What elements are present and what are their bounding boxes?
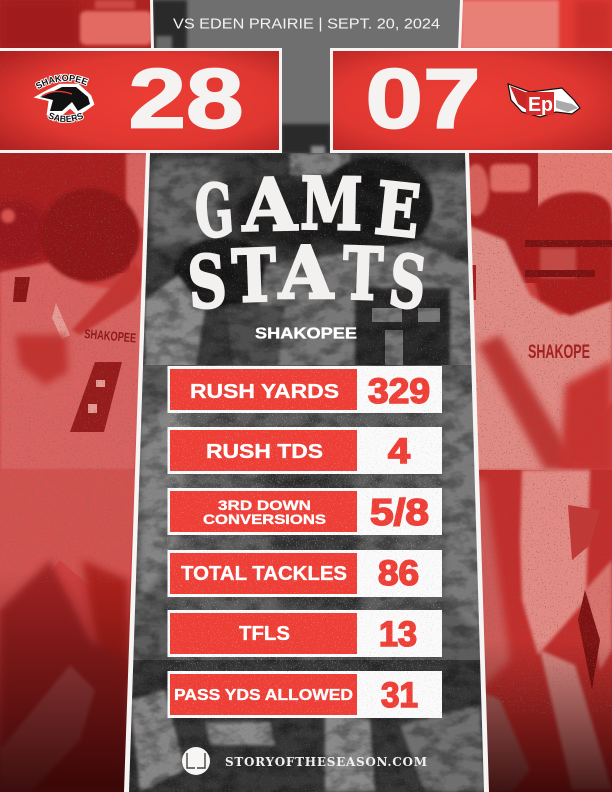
title: GAME STATS: A xyxy=(278,230,334,315)
stat row: rush TDs: RUSH TDS xyxy=(206,441,323,463)
stat row: rush yards xyxy=(168,366,442,413)
match line: VS EDEN PRAIRIE | SEPT. 20, 2024 xyxy=(173,16,440,32)
logo: Shakopee Sabers xyxy=(34,74,94,123)
title: GAME STATS: M xyxy=(300,160,363,247)
icon: Story of the Season book xyxy=(182,747,210,775)
stat row: 3rd down conversions: 5/8 xyxy=(370,492,429,533)
title: GAME STATS: S xyxy=(385,237,430,326)
website: STORYOFTHESEASON.COM xyxy=(225,755,427,769)
stat row: pass yards allowed: 31 xyxy=(381,676,418,715)
title: GAME STATS: A xyxy=(241,162,298,247)
photo: left player xyxy=(0,153,150,792)
stat row: total tackles xyxy=(168,550,442,597)
title: GAME STATS xyxy=(185,160,430,326)
panel: top left photo strip xyxy=(0,0,152,50)
panel: Shakopee score xyxy=(0,48,282,153)
stat row: TFLs xyxy=(168,610,442,657)
logo: Eden Prairie eagle xyxy=(508,84,580,117)
stat row: rush TDs: 4 xyxy=(388,432,411,471)
score: 28: 28 xyxy=(128,52,244,146)
stat row: pass yards allowed xyxy=(168,671,442,718)
team name: SHAKOPEE xyxy=(255,326,357,342)
title: GAME STATS: S xyxy=(185,238,229,325)
stat row: pass yards allowed: PASS YDS ALLOWED xyxy=(174,687,353,704)
title: GAME STATS: E xyxy=(371,165,424,254)
stat row: rush yards: RUSH YARDS xyxy=(190,381,339,403)
stat row: rush yards: 329 xyxy=(368,372,430,411)
stat row: rush TDs xyxy=(168,427,442,474)
white edge lines between photo panels xyxy=(124,0,489,792)
panel: Eden Prairie score xyxy=(330,48,612,153)
speckle over stat rows xyxy=(167,366,442,718)
photo: left player: SHAKOPEE xyxy=(84,326,137,346)
panel: top centre photo, black and white xyxy=(152,0,461,156)
title: GAME STATS: G xyxy=(192,167,236,254)
stat row: TFLs: TFLS xyxy=(239,623,290,645)
score: 07: 07 xyxy=(366,52,480,146)
stat row: 3rd down conversions: CONVERSIONS xyxy=(203,511,326,527)
stat row: 3rd down conversions xyxy=(168,488,442,535)
stat row: total tackles: TOTAL TACKLES xyxy=(181,563,347,585)
logo: Shakopee Sabers: SABERS xyxy=(48,112,84,123)
photo: right player xyxy=(463,153,612,792)
title: GAME STATS: T xyxy=(231,232,278,319)
panel: top right photo strip xyxy=(461,0,612,50)
stat row: 3rd down conversions: 3RD DOWN xyxy=(218,497,311,513)
logo: Eden Prairie eagle: Ep xyxy=(528,94,553,116)
title: GAME STATS: T xyxy=(341,230,384,317)
panel: centre column photo xyxy=(120,150,490,792)
stat row: TFLs: 13 xyxy=(379,615,417,654)
stat row: total tackles: 86 xyxy=(378,554,419,593)
logo: Shakopee Sabers: SHAKOPEE xyxy=(35,74,89,90)
